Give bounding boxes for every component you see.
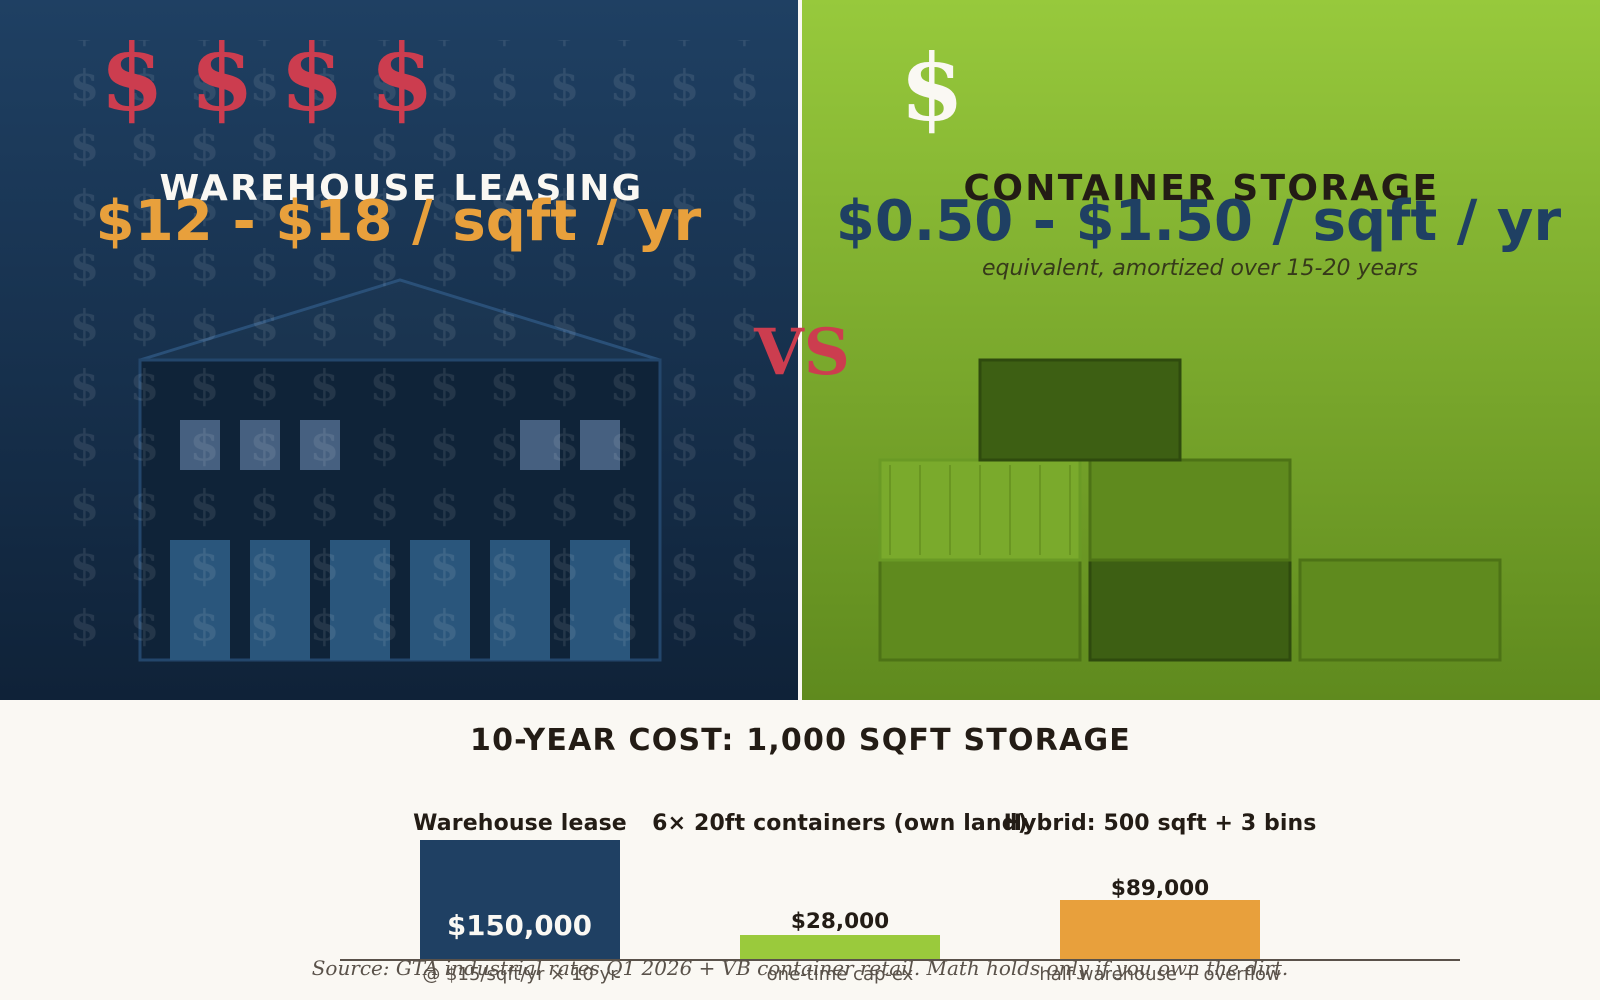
chart axis — [340, 959, 1460, 961]
bar notes — [422, 964, 1281, 985]
source note: Source: GTA industrial rates Q1 2026 + VB container retail. Math holds only if you own the dirt. — [312, 956, 1288, 980]
dollar sign pattern — [70, 1, 759, 650]
dollar sign pattern: $$$$$$$$$$$$ — [70, 241, 759, 290]
bar: hybrid: $89,000 — [1111, 876, 1209, 901]
bar: hybrid: Hybrid: 500 sqft + 3 bins — [1004, 811, 1316, 836]
dollar sign pattern: $$$$$$$$$$$$ — [70, 61, 759, 110]
panel: 10-year cost chart — [312, 723, 1460, 985]
price: container: $0.50 - $1.50 / sqft / yr — [836, 189, 1561, 254]
bar: containers: 6× 20ft containers (own land) — [652, 811, 1028, 836]
bar: warehouse lease — [413, 811, 627, 960]
price note: equivalent, amortized over 15-20 years — [982, 256, 1418, 281]
bar notes: half warehouse + overflow — [1039, 964, 1281, 985]
price: warehouse: $12 - $18 / sqft / yr — [96, 189, 702, 254]
panel: warehouse leasing — [0, 0, 798, 700]
dollar sign pattern: $$$$$$$$$$$$ — [70, 1, 759, 50]
chart title: 10-YEAR COST: 1,000 SQFT STORAGE — [470, 723, 1131, 758]
bar: containers: $28,000 — [791, 909, 889, 934]
icon: warehouse building — [140, 280, 660, 660]
divider — [798, 0, 802, 700]
dollar sign pattern: $$$$$$$$$$$$ — [70, 421, 759, 470]
bar notes: one-time cap-ex — [767, 964, 914, 985]
dollar sign pattern: $$$$$$$$$$$$ — [70, 601, 759, 650]
dollar sign pattern: $$$$$$$$$$$$ — [70, 121, 759, 170]
dollar sign pattern: $$$$$$$$$$$$ — [70, 301, 759, 350]
dollar sign pattern: $$$$$$$$$$$$ — [70, 361, 759, 410]
panel: container storage — [802, 0, 1600, 700]
dollar sign pattern: $$$$$$$$$$$$ — [70, 481, 759, 530]
VS badge: VS — [753, 315, 850, 390]
icon: stacked containers — [880, 360, 1500, 660]
bar: warehouse lease: $150,000 — [447, 909, 592, 942]
bar: hybrid — [1004, 811, 1316, 960]
bar: containers — [652, 811, 1028, 960]
dollar sign pattern: $$$$$$$$$$$$ — [70, 541, 759, 590]
dollar sign pattern: $$$$$$$$$$$$ — [70, 181, 759, 230]
bar: warehouse lease: Warehouse lease — [413, 811, 627, 836]
icon: four red dollar signs: $$$$ — [100, 24, 434, 132]
bar notes: @ $15/sqft/yr × 10 yr — [422, 964, 618, 985]
heading: warehouse leasing: WAREHOUSE LEASING — [160, 168, 643, 209]
heading: container storage: CONTAINER STORAGE — [964, 168, 1439, 209]
icon: one white dollar sign: $ — [900, 34, 964, 142]
